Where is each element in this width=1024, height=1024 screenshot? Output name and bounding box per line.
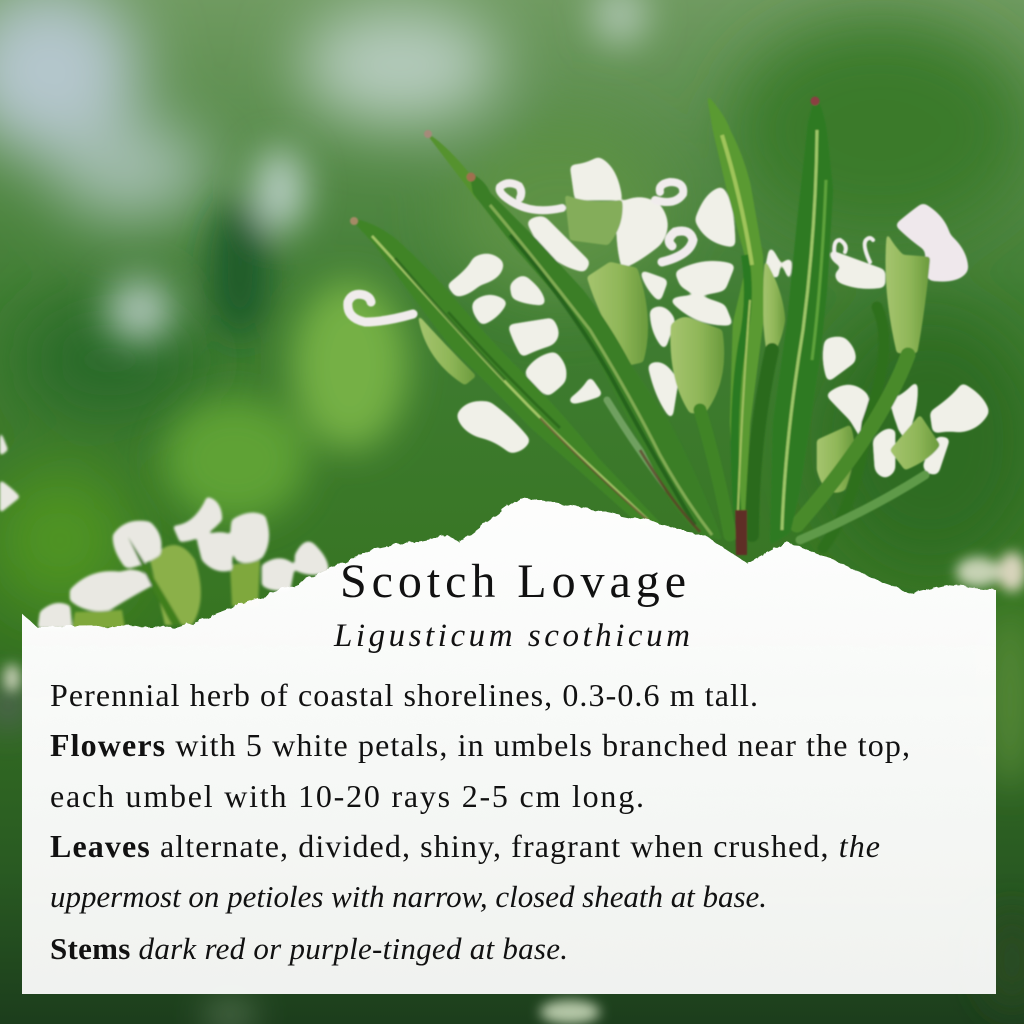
- leaf: back thin tip: [425, 132, 490, 200]
- description text: Perennial herb of coastal shorelines, 0.3-0.6 m tall.: [50, 677, 758, 713]
- description text: Stems dark red or purple-tinged at base.: [50, 931, 568, 966]
- main plant: flowers and leaves: [348, 95, 989, 555]
- leaf tips: [810, 96, 820, 106]
- description text: Flowers with 5 white petals, in umbels branched near the top,: [50, 727, 910, 763]
- description text: uppermost on petioles with narrow, closed sheath at base.: [50, 879, 767, 914]
- green ovaries: [418, 195, 940, 492]
- leaf: centre: [707, 95, 763, 545]
- curled petals: [348, 182, 873, 322]
- thin stems: [607, 307, 925, 548]
- description text: [50, 677, 910, 966]
- left foreground flower cluster: [0, 430, 328, 628]
- leaf: second: [470, 173, 722, 540]
- torn paper panel: [8, 498, 1010, 1010]
- leaf: right: [770, 95, 833, 545]
- title: Scotch Lovage: [340, 555, 686, 608]
- description text: each umbel with 10-20 rays 2-5 cm long.: [50, 778, 644, 814]
- leaf: left: [350, 218, 662, 525]
- description text: Leaves alternate, divided, shiny, fragrant when crushed, the: [50, 828, 880, 864]
- subtitle: Ligusticum scothicum: [333, 618, 690, 654]
- stem base: [735, 510, 747, 555]
- white petals behind: [447, 157, 989, 478]
